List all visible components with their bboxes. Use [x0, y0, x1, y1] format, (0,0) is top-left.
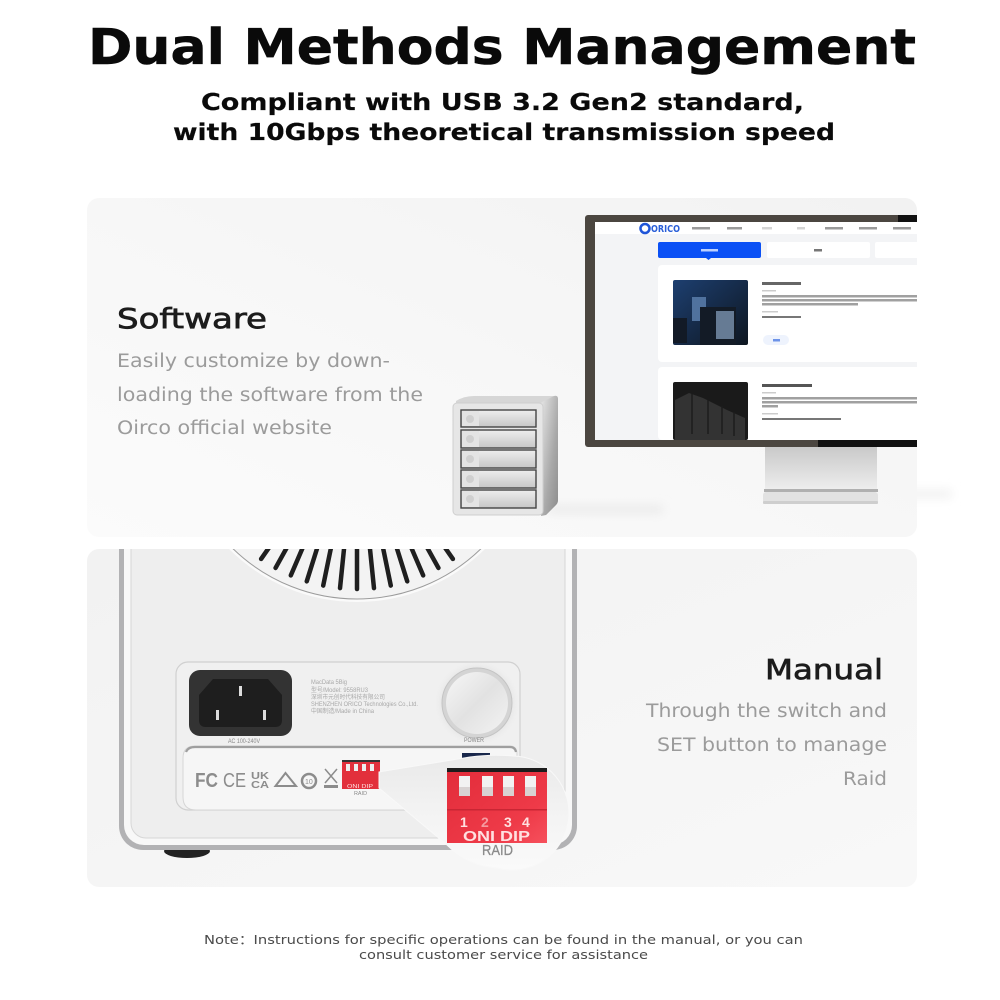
website nav bar: ORICO	[651, 224, 680, 235]
subtitle: Compliant with USB 3.2 Gen2 standard,	[201, 90, 804, 116]
model info label: MacData 5Big	[311, 680, 347, 686]
power button	[440, 666, 514, 740]
small DIP switch: ONI DIP	[347, 784, 373, 790]
model info label: 深圳市元创时代科技有限公司	[311, 693, 385, 701]
small DIP switch	[342, 760, 380, 797]
text block: software description: Easily customize by down-	[117, 351, 390, 372]
footer note: Note：Instructions for specific operations can be found in the manual, or you can	[204, 932, 803, 947]
subtitle: with 10Gbps theoretical transmission speed	[173, 120, 835, 146]
text block: software description: loading the software from the	[117, 385, 423, 406]
website card 1	[658, 265, 928, 362]
certification marks: CA	[251, 779, 269, 791]
text block: manual description	[645, 701, 887, 790]
model info label: 中国制造/Made in China	[311, 707, 375, 715]
website card 2	[658, 367, 928, 440]
enlarged DIP switch	[447, 768, 547, 845]
panel: software	[87, 198, 930, 537]
model info label: 型号/Model: 9558RU3	[311, 686, 369, 694]
text block: manual description: SET button to manage	[657, 735, 887, 756]
certification marks: CE	[223, 770, 246, 792]
port recess	[183, 746, 517, 810]
footer note	[204, 932, 803, 962]
heading: software: Software	[117, 302, 267, 335]
panel: manual	[87, 549, 917, 887]
enlarged DIP switch: 4	[522, 814, 530, 830]
website tabs	[658, 242, 925, 260]
enlarged DIP switch: ONI DIP	[463, 829, 530, 845]
subtitle	[173, 90, 835, 146]
NAS enclosure	[453, 396, 558, 516]
drive bays	[461, 410, 536, 508]
certification marks	[195, 769, 338, 792]
device feet	[164, 850, 210, 858]
shadows under devices	[556, 508, 653, 512]
model info label: SHENZHEN ORICO Technologies Co.,Ltd.	[311, 702, 418, 708]
fan grille	[230, 549, 484, 602]
monitor	[585, 215, 930, 447]
enlarged DIP switch: 1	[460, 814, 468, 830]
power socket	[189, 670, 292, 736]
rear plate	[176, 662, 520, 810]
certification marks: FC	[195, 770, 218, 792]
monitor stand	[763, 447, 878, 504]
RAID label: RAID	[482, 843, 513, 859]
small DIP switch: RAID	[354, 791, 367, 797]
magnifier callout	[378, 754, 566, 856]
text block: software description: Oirco official website	[117, 418, 332, 439]
screen	[595, 222, 930, 440]
socket label: AC 100-240V	[228, 739, 260, 745]
heading: manual: Manual	[765, 653, 883, 686]
enlarged DIP switch: 2	[481, 814, 489, 830]
certification marks: UK	[251, 770, 269, 782]
enlarged DIP switch: 3	[504, 814, 512, 830]
power label: POWER	[464, 738, 485, 744]
certification marks: 10	[305, 779, 313, 786]
text block: manual description: Through the switch and	[645, 701, 887, 722]
footer note: consult customer service for assistance	[359, 947, 648, 962]
monitor shadow beyond panel	[880, 490, 952, 498]
website nav bar	[595, 222, 930, 235]
text block: software description	[117, 351, 423, 439]
device rear body	[119, 549, 577, 850]
text block: manual description: Raid	[843, 769, 887, 790]
model info label	[311, 680, 418, 715]
title: Dual Methods Management	[88, 19, 916, 76]
